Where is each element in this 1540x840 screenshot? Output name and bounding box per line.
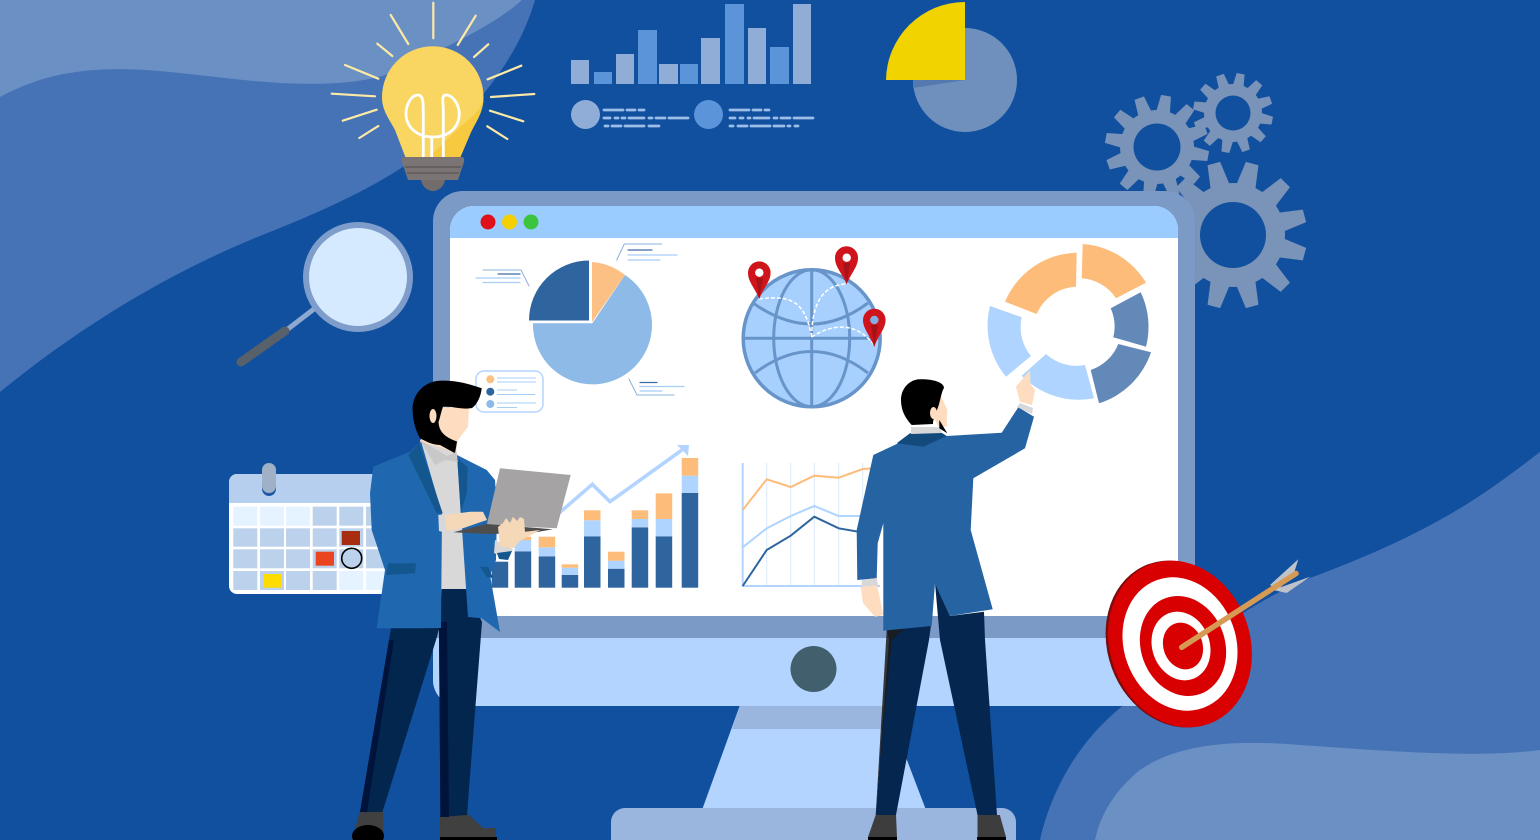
globe [743, 246, 886, 407]
stacked bar chart [492, 445, 698, 588]
calendar ring [262, 463, 276, 496]
lowered hand [861, 578, 883, 617]
arrow fletching [1270, 559, 1310, 593]
laptop [453, 468, 571, 534]
window buttons [480, 214, 538, 230]
pie chart top [886, 2, 1017, 132]
calendar cells [233, 507, 390, 590]
monitor [433, 191, 1195, 840]
jacket lapels [386, 443, 493, 578]
monitor frame [433, 191, 1195, 706]
chart legend [571, 100, 813, 129]
magnifying glass [241, 225, 410, 362]
keyboard hand and cuff [438, 512, 487, 533]
left man trousers [360, 589, 482, 817]
pie callouts [476, 244, 684, 395]
right man shoes [868, 815, 1006, 840]
raised hand [1016, 370, 1035, 414]
man pointing at chart [857, 370, 1035, 840]
calendar markers [263, 531, 362, 588]
calendar [229, 463, 399, 594]
left man neck and face [413, 381, 482, 454]
left man shoes [352, 811, 497, 840]
bulb rays [332, 3, 534, 139]
arrow shaft [1182, 574, 1296, 647]
monitor chin [433, 638, 1195, 706]
screen pie chart [476, 244, 684, 412]
donut chart [988, 244, 1151, 403]
right man collar [897, 427, 947, 447]
pie legend [476, 371, 543, 412]
gear: medium [1105, 95, 1209, 199]
line chart [743, 463, 880, 586]
right man trousers [876, 583, 997, 815]
power button [790, 646, 836, 692]
man with laptop [352, 381, 571, 840]
top bar chart [571, 4, 811, 84]
light bulb [332, 3, 534, 191]
target board [1083, 540, 1275, 748]
trend arrow [558, 445, 689, 514]
gear: large [1159, 161, 1307, 309]
screen [450, 206, 1178, 616]
right man head [901, 379, 947, 433]
map pins [748, 246, 886, 347]
gear: small [1193, 73, 1273, 153]
target with arrow [1083, 540, 1310, 748]
holding hand and sleeve [494, 517, 540, 560]
gears [1105, 73, 1307, 309]
right man jacket [857, 407, 1034, 631]
left man shirt [420, 440, 467, 589]
title bar [450, 206, 1178, 238]
monitor stand [611, 705, 1016, 840]
left man jacket [370, 441, 442, 628]
right side of jacket [457, 455, 500, 632]
left man shirt collar [420, 440, 458, 465]
